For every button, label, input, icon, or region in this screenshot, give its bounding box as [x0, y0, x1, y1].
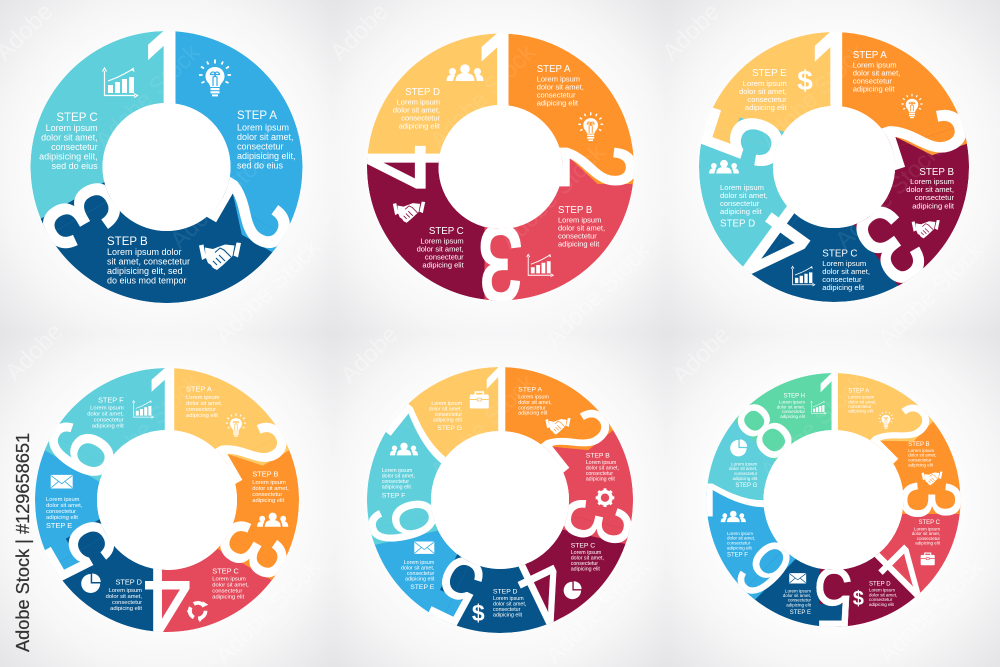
icon: people — [721, 511, 746, 522]
text: step B: Lorem ipsum — [586, 460, 617, 466]
panel: 3-step ring — [30, 31, 302, 303]
numeral 4: 4 — [345, 145, 465, 189]
text: step B: do eius mod tempor — [107, 275, 187, 285]
text: step A: STEP A — [237, 110, 277, 122]
text: step B: STEP B — [252, 470, 278, 479]
text: step B: STEP B — [558, 205, 592, 216]
text: step A: STEP A — [186, 384, 212, 393]
text: step C: dolor sit amet, — [417, 245, 464, 254]
text: step B: Lorem ipsum — [558, 216, 601, 225]
text: step C: Lorem ipsum — [571, 550, 602, 556]
text: step B: dolor sit amet, — [558, 224, 605, 233]
icon: light bulb — [226, 413, 246, 437]
text: step A: Lorem ipsum — [186, 395, 220, 401]
numeral 2: 2 — [186, 163, 318, 270]
text: step E: consectetur — [46, 509, 76, 515]
watermark behind charts: Adobe — [0, 318, 68, 386]
watermark over charts: Adobe Stock — [425, 38, 541, 154]
icon: briefcase — [921, 553, 935, 565]
text: step B: adipicing elit — [908, 463, 934, 468]
text: step B: STEP B — [586, 452, 610, 459]
ring with numerals 1-8 — [688, 353, 979, 645]
watermark behind charts: Adobe Stock — [210, 553, 326, 667]
icon: pie chart — [81, 574, 101, 593]
numeral 4: 4 — [500, 532, 586, 648]
numeral 8: 8 — [717, 383, 812, 479]
text: step B: Lorem ipsum — [252, 480, 286, 486]
icon: light bulb — [878, 411, 894, 429]
watermark behind charts: Adobe Stock — [540, 236, 656, 352]
text: step F: Lorem ipsum — [90, 406, 124, 412]
icon: envelope — [414, 542, 434, 554]
text: step A: adipicing elit — [537, 98, 579, 107]
text: step B: consectetur — [908, 458, 932, 463]
numeral 1: 1 — [807, 4, 862, 151]
panel: 7-step ring — [367, 367, 633, 633]
text: step A: consectetur — [537, 90, 576, 99]
text: step A: adipisicing elit, — [237, 151, 296, 161]
text: step B: dolor sit amet, — [908, 453, 937, 458]
numeral 1: 1 — [140, 5, 196, 148]
text: step H: consectetur — [782, 409, 805, 414]
text: step A: Lorem ipsum — [853, 61, 897, 70]
text: step B: adipicing elit — [252, 498, 285, 504]
watermark behind charts: Adobe — [667, 321, 735, 389]
panel: 8-step ring — [688, 353, 979, 645]
text: step C: Lorem ipsum — [822, 259, 866, 268]
text: step C: STEP C — [822, 249, 858, 260]
panel: 4-step ring — [367, 34, 634, 300]
text: step F: dolor sit amet, — [382, 473, 415, 479]
text: step C: dolor sit amet, — [41, 133, 98, 143]
text: step G: consectetur — [435, 412, 462, 418]
ring with numerals 1-5 — [699, 32, 969, 302]
ring segments — [403, 69, 598, 265]
text: step C: dolor sit amet, — [912, 531, 940, 536]
icon: growth chart — [102, 68, 138, 98]
panel: 6-step ring — [35, 368, 299, 632]
text: step B: adipicing elit — [586, 476, 615, 482]
text: step H: adipicing elit — [780, 414, 806, 419]
text: step B: Lorem ipsum — [908, 448, 935, 453]
numeral 6: 6 — [23, 403, 138, 497]
text: step G: consectetur — [734, 471, 758, 476]
icon: handshake — [545, 418, 571, 434]
text: step D: consectetur — [493, 607, 521, 613]
numeral 4: 4 — [855, 521, 950, 617]
text: step E: dolor sit amet, — [46, 503, 83, 509]
text: step A: dolor sit amet, — [853, 69, 900, 78]
text: step G: Lorem ipsum — [431, 401, 462, 407]
icon: growth chart — [527, 254, 553, 277]
text: step D: dolor sit amet, — [106, 594, 142, 600]
icon: people — [446, 64, 484, 81]
text: step D: consectetur — [869, 597, 893, 602]
icon: cycle arrows — [187, 601, 208, 622]
ring with numerals 1-4 — [367, 34, 634, 300]
text: step A: Lorem ipsum — [518, 394, 550, 400]
text: step D: consectetur — [720, 199, 760, 208]
text: step C: sed do eius — [52, 161, 98, 171]
text: step B: adipicing elit — [558, 240, 600, 249]
text: step B: STEP B — [919, 167, 954, 178]
text: step E: dolor sit amet, — [401, 565, 434, 571]
watermark over charts: Adobe Stock — [495, 138, 611, 254]
numeral 6: 6 — [717, 521, 812, 617]
icon: handshake — [922, 472, 942, 485]
icon: growth chart — [132, 400, 154, 418]
text: step B: adipicing elit — [912, 202, 955, 211]
watermark behind charts: Adobe — [335, 321, 403, 389]
text: step C: adipicing elit — [212, 595, 245, 601]
icon: pie chart — [730, 439, 747, 456]
text: step F: Lorem ipsum — [382, 468, 412, 474]
numeral 1: 1 — [814, 353, 853, 462]
watermark over charts: Adobe Stock — [755, 38, 871, 154]
text: step C: STEP C — [56, 112, 98, 124]
text: step E: consectetur — [788, 598, 811, 603]
panel: 5-step ring — [699, 32, 969, 302]
numeral 2: 2 — [855, 383, 950, 479]
text: step F: adipicing elit — [727, 545, 753, 550]
watermark behind charts: Adobe Stock — [210, 233, 326, 349]
text: step G: dolor sit amet, — [429, 406, 462, 412]
text: step D: adipicing elit — [110, 606, 142, 612]
icon: dollar: $ — [853, 588, 864, 610]
text: step A: Lorem ipsum — [848, 394, 875, 399]
text: step A: sed do eius — [237, 160, 284, 170]
numeral 3: 3 — [540, 489, 655, 555]
text: step D: Lorem ipsum — [493, 596, 524, 602]
numeral 2: 2 — [858, 94, 993, 181]
icon: light bulb — [199, 60, 231, 96]
watermark over charts: Adobe Stock — [165, 138, 281, 254]
ring segments — [697, 30, 971, 304]
numeral 5: 5 — [414, 532, 500, 648]
text: step D: consectetur — [112, 600, 142, 606]
text: step F: consectetur — [727, 540, 751, 545]
icon: briefcase — [470, 392, 489, 408]
text: step D: Lorem ipsum — [869, 588, 895, 593]
text: step C: STEP C — [918, 520, 940, 526]
text: step B: consectetur — [586, 471, 613, 477]
icon: people — [257, 513, 288, 527]
text: step E: Lorem ipsum — [785, 588, 811, 593]
text: step F: STEP F — [727, 552, 748, 558]
text: step B: STEP B — [908, 442, 930, 448]
icon: envelope — [51, 475, 73, 488]
text: step D: STEP D — [115, 577, 142, 586]
watermark over charts: Adobe Stock — [425, 368, 541, 484]
icon: envelope — [789, 573, 806, 584]
text: step E: dolor sit amet, — [739, 87, 787, 96]
watermark behind charts: Adobe — [325, 0, 393, 66]
text: step A: consectetur — [518, 405, 546, 411]
text: step C: adipisicing elit, — [39, 152, 98, 162]
text: step E: STEP E — [790, 610, 811, 616]
text: step A: STEP A — [537, 64, 570, 75]
ring segments — [30, 30, 303, 304]
watermark over charts: Adobe Stock — [830, 138, 946, 254]
text: step B: dolor sit amet, — [906, 185, 954, 194]
numeral 7: 7 — [688, 480, 783, 520]
numeral 6: 6 — [345, 489, 460, 555]
text: step C: consectetur — [212, 589, 242, 595]
text: step C: STEP C — [212, 566, 239, 575]
text: step D: dolor sit amet, — [393, 106, 440, 115]
ring with numerals 1-3 — [30, 31, 302, 303]
numeral 7: 7 — [366, 387, 478, 488]
text: step D: STEP D — [405, 87, 440, 98]
text: step C: Lorem ipsum — [914, 526, 940, 531]
icon: pie chart — [564, 581, 582, 599]
numeral 3: 3 — [196, 503, 311, 597]
icon: dollar: $ — [797, 65, 813, 96]
numeral 1: 1 — [144, 345, 192, 466]
text: step G: adipicing elit — [433, 417, 463, 423]
icon: handshake — [199, 242, 241, 270]
text: step G: dolor sit amet, — [729, 466, 757, 471]
text: step E: STEP E — [752, 68, 787, 79]
watermark over charts: Adobe Stock — [90, 368, 206, 484]
watermark behind charts: Adobe — [657, 0, 725, 66]
icon: growth chart — [791, 266, 815, 286]
text: step D: Lorem ipsum — [720, 183, 764, 192]
text: step D: Lorem ipsum — [397, 98, 440, 107]
icon: light bulb — [901, 94, 923, 118]
text: step C: adipicing elit — [422, 261, 465, 270]
watermark behind charts: Adobe Stock — [540, 553, 656, 667]
watermark over charts: Adobe Stock — [90, 38, 206, 154]
ring with numerals 1-7 — [367, 367, 633, 633]
text: step H: STEP H — [783, 394, 805, 400]
text: step C: Lorem ipsum — [212, 577, 246, 583]
text: step F: STEP F — [98, 395, 124, 404]
numeral 3: 3 — [833, 179, 948, 311]
text: step E: STEP E — [410, 584, 435, 591]
watermark behind charts: Adobe Stock — [873, 553, 989, 667]
text: step F: consectetur — [94, 418, 124, 424]
text: step C: consectetur — [917, 536, 940, 541]
text: step G: STEP G — [735, 483, 758, 489]
text: step E: dolor sit amet, — [783, 593, 811, 598]
icon: gear — [596, 488, 614, 507]
text: step B: STEP B — [107, 236, 148, 248]
text: step F: dolor sit amet, — [87, 412, 124, 418]
text: step C: Lorem ipsum — [46, 123, 98, 133]
text: step B: consectetur — [252, 492, 282, 498]
text: step A: STEP A — [853, 50, 887, 61]
text: step C: consectetur — [51, 142, 98, 152]
text: step C: adipicing elit — [915, 541, 941, 546]
text: step E: adipicing elit — [46, 515, 78, 521]
text: step E: adipicing elit — [745, 103, 788, 112]
text: step F: Lorem ipsum — [727, 531, 753, 536]
text: step A: adipicing elit — [848, 409, 874, 414]
text: step D: STEP D — [720, 219, 755, 230]
text: step D: dolor sit amet, — [720, 191, 768, 200]
text: step C: consectetur — [571, 561, 598, 567]
text: step C: dolor sit amet, — [212, 583, 249, 589]
icon: handshake — [912, 220, 940, 238]
icon: people — [709, 160, 739, 173]
text: step E: STEP E — [46, 521, 72, 530]
text: step A: adipicing elit — [853, 85, 895, 94]
numeral 5: 5 — [23, 503, 138, 597]
text: step A: dolor sit amet, — [537, 82, 584, 91]
text: step E: Lorem ipsum — [743, 79, 787, 88]
text: step B: sit amet, consectetur — [107, 256, 190, 266]
text: step A: STEP A — [518, 386, 542, 393]
text: step A: dolor sit amet, — [518, 400, 552, 406]
numeral 5: 5 — [675, 94, 810, 181]
text: step C: Lorem ipsum — [420, 237, 464, 246]
stock id label: Adobe Stock | #129658651 — [13, 433, 33, 652]
numeral 2: 2 — [536, 145, 656, 189]
text: step A: dolor sit amet, — [237, 132, 294, 142]
text: step C: dolor sit amet, — [822, 267, 870, 276]
text: step F: STEP F — [382, 493, 405, 500]
text: step E: adipicing elit — [786, 603, 812, 608]
text: step E: Lorem ipsum — [46, 497, 80, 503]
text: step C: STEP C — [429, 226, 464, 237]
watermark over charts: Adobe Stock — [755, 368, 871, 484]
text: step D: dolor sit amet, — [493, 602, 526, 608]
text: step A: dolor sit amet, — [186, 401, 223, 407]
text: step A: Lorem ipsum — [537, 74, 580, 83]
icon: people — [390, 443, 418, 455]
text: step G: STEP G — [437, 425, 462, 432]
text: step F: adipicing elit — [92, 424, 124, 430]
text: step G: Lorem ipsum — [731, 461, 757, 466]
text: step E: consectetur — [747, 95, 787, 104]
text: step D: STEP D — [493, 588, 517, 595]
text: step D: adipicing elit — [399, 122, 441, 131]
text: step D: Lorem ipsum — [108, 588, 142, 594]
text: step B: Lorem ipsum — [910, 177, 954, 186]
icon: handshake — [393, 202, 425, 223]
text: step C: consectetur — [425, 253, 464, 262]
numeral 1: 1 — [480, 343, 521, 466]
text: step G: adipicing elit — [733, 476, 758, 481]
ring segments — [367, 367, 633, 633]
text: step F: adipicing elit — [382, 484, 411, 490]
text: step A: Lorem ipsum — [237, 123, 289, 133]
text: step H: Lorem ipsum — [779, 400, 805, 405]
text: step A: dolor sit amet, — [848, 399, 877, 404]
text: step A: adipicing elit — [186, 413, 218, 419]
text: step A: consectetur — [848, 404, 872, 409]
text: step A: adipicing elit — [518, 411, 548, 417]
text: step B: Lorem ipsum dolor — [107, 247, 182, 257]
text: step E: Lorem ipsum — [404, 560, 434, 566]
text: step D: dolor sit amet, — [869, 592, 897, 597]
numeral 4: 4 — [720, 179, 835, 311]
numeral 1: 1 — [473, 8, 529, 149]
text: step C: adipicing elit — [822, 283, 865, 292]
text: step H: dolor sit amet, — [777, 404, 805, 409]
text: step C: adipicing elit — [571, 567, 600, 573]
text: step B: adipisicing elit, sed — [107, 266, 183, 276]
numeral 2: 2 — [196, 403, 311, 497]
text: step B: consectetur — [915, 193, 954, 202]
ring segments — [694, 361, 973, 639]
text: step D: adipicing elit — [869, 602, 895, 607]
text: step D: adipicing elit — [720, 207, 763, 216]
text: step B: dolor sit amet, — [586, 465, 619, 471]
text: step F: consectetur — [382, 479, 409, 485]
numeral 2: 2 — [522, 387, 634, 488]
text: step D: adipicing elit — [493, 613, 523, 619]
ring segments — [29, 362, 305, 638]
text: step D: STEP D — [869, 582, 891, 588]
watermark behind charts: Adobe Stock — [873, 236, 989, 352]
text: step C: consectetur — [822, 275, 862, 284]
ring with numerals 1-6 — [35, 368, 299, 632]
text: step A: consectetur — [237, 142, 284, 152]
text: step A: consectetur — [853, 77, 892, 86]
numeral 3: 3 — [884, 480, 979, 520]
numeral 5: 5 — [813, 550, 854, 645]
numeral 4: 4 — [143, 547, 191, 652]
numeral 3: 3 — [478, 202, 523, 323]
text: step C: dolor sit amet, — [571, 556, 604, 562]
text: step A: consectetur — [186, 407, 216, 413]
icon: dollar: $ — [472, 600, 485, 626]
icon: growth chart — [811, 401, 826, 414]
text: step D: consectetur — [401, 114, 440, 123]
numeral 3: 3 — [15, 163, 147, 270]
text: step B: consectetur — [558, 232, 597, 241]
text: step A: STEP A — [848, 389, 869, 395]
text: step C: STEP C — [571, 542, 595, 549]
watermark over charts — [90, 38, 946, 484]
text: step B: dolor sit amet, — [252, 486, 289, 492]
text: step E: adipicing elit — [405, 577, 435, 583]
icon: light bulb — [578, 112, 603, 141]
text: step E: consectetur — [407, 571, 435, 577]
text: step F: dolor sit amet, — [727, 536, 755, 541]
